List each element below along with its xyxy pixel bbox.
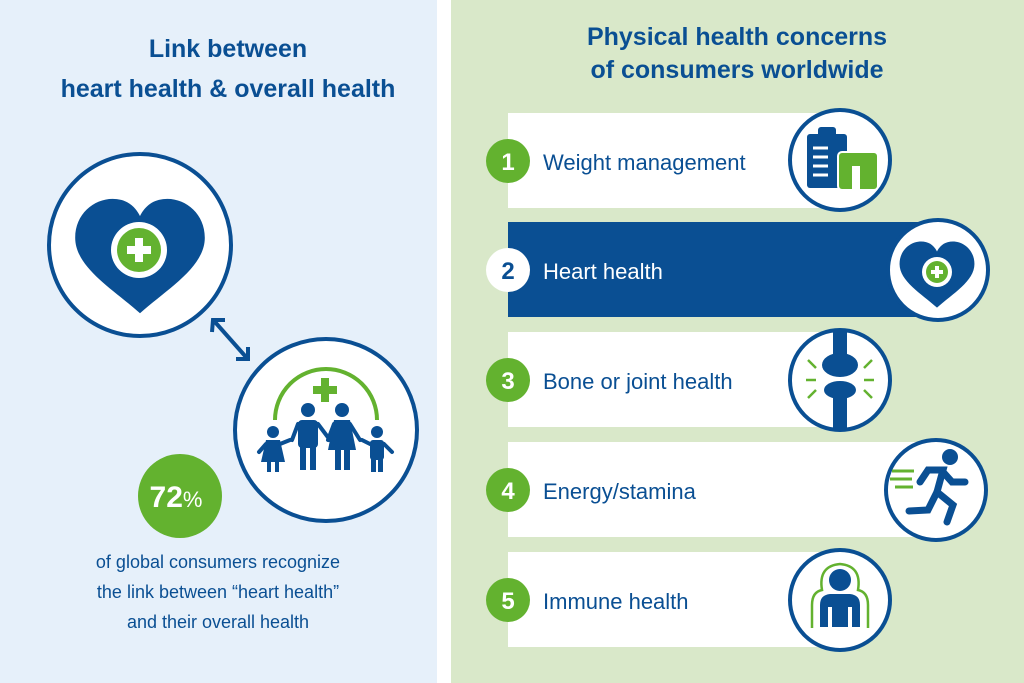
panel: right background (451, 0, 1024, 683)
title: right: Physical health concerns (587, 23, 887, 51)
text block: statistic description: and their overall health (127, 612, 309, 632)
callout: 72%: 72% (150, 481, 202, 514)
row 5: immune health: Immune health (543, 589, 689, 614)
panel: left background (0, 0, 437, 683)
row 3: bone or joint health (486, 330, 890, 430)
title: right (587, 23, 887, 84)
text block: statistic description: the link between “heart health” (97, 582, 339, 602)
row 1: weight management (486, 110, 890, 210)
title: left: heart health & overall health (61, 75, 395, 103)
row 1: weight management: 1 (501, 149, 515, 176)
callout: 72% (138, 454, 222, 538)
row 2: heart health (highlighted): 2 (501, 258, 515, 285)
arrow: double-headed (212, 320, 248, 359)
row 4: energy/stamina (486, 440, 986, 540)
title: left: Link between (149, 35, 307, 63)
row 3: bone or joint health: Bone or joint health (543, 369, 733, 394)
row 3: bone or joint health: 3 (501, 368, 515, 395)
row 2: heart health (highlighted): Heart health (543, 259, 663, 284)
row 4: energy/stamina: Energy/stamina (543, 479, 697, 504)
row 2: heart health (highlighted) (486, 220, 988, 320)
row 1: weight management: Weight management (543, 150, 746, 175)
row 5: immune health: 5 (501, 588, 515, 615)
icon: family circle (235, 339, 417, 521)
title: right: of consumers worldwide (590, 56, 884, 84)
text block: statistic description: of global consumers recognize (96, 552, 340, 572)
row 5: immune health (486, 550, 890, 650)
title: left (61, 35, 395, 103)
row 4: energy/stamina: 4 (501, 478, 515, 505)
icon: heart circle (49, 154, 231, 336)
text block: statistic description (96, 552, 340, 632)
